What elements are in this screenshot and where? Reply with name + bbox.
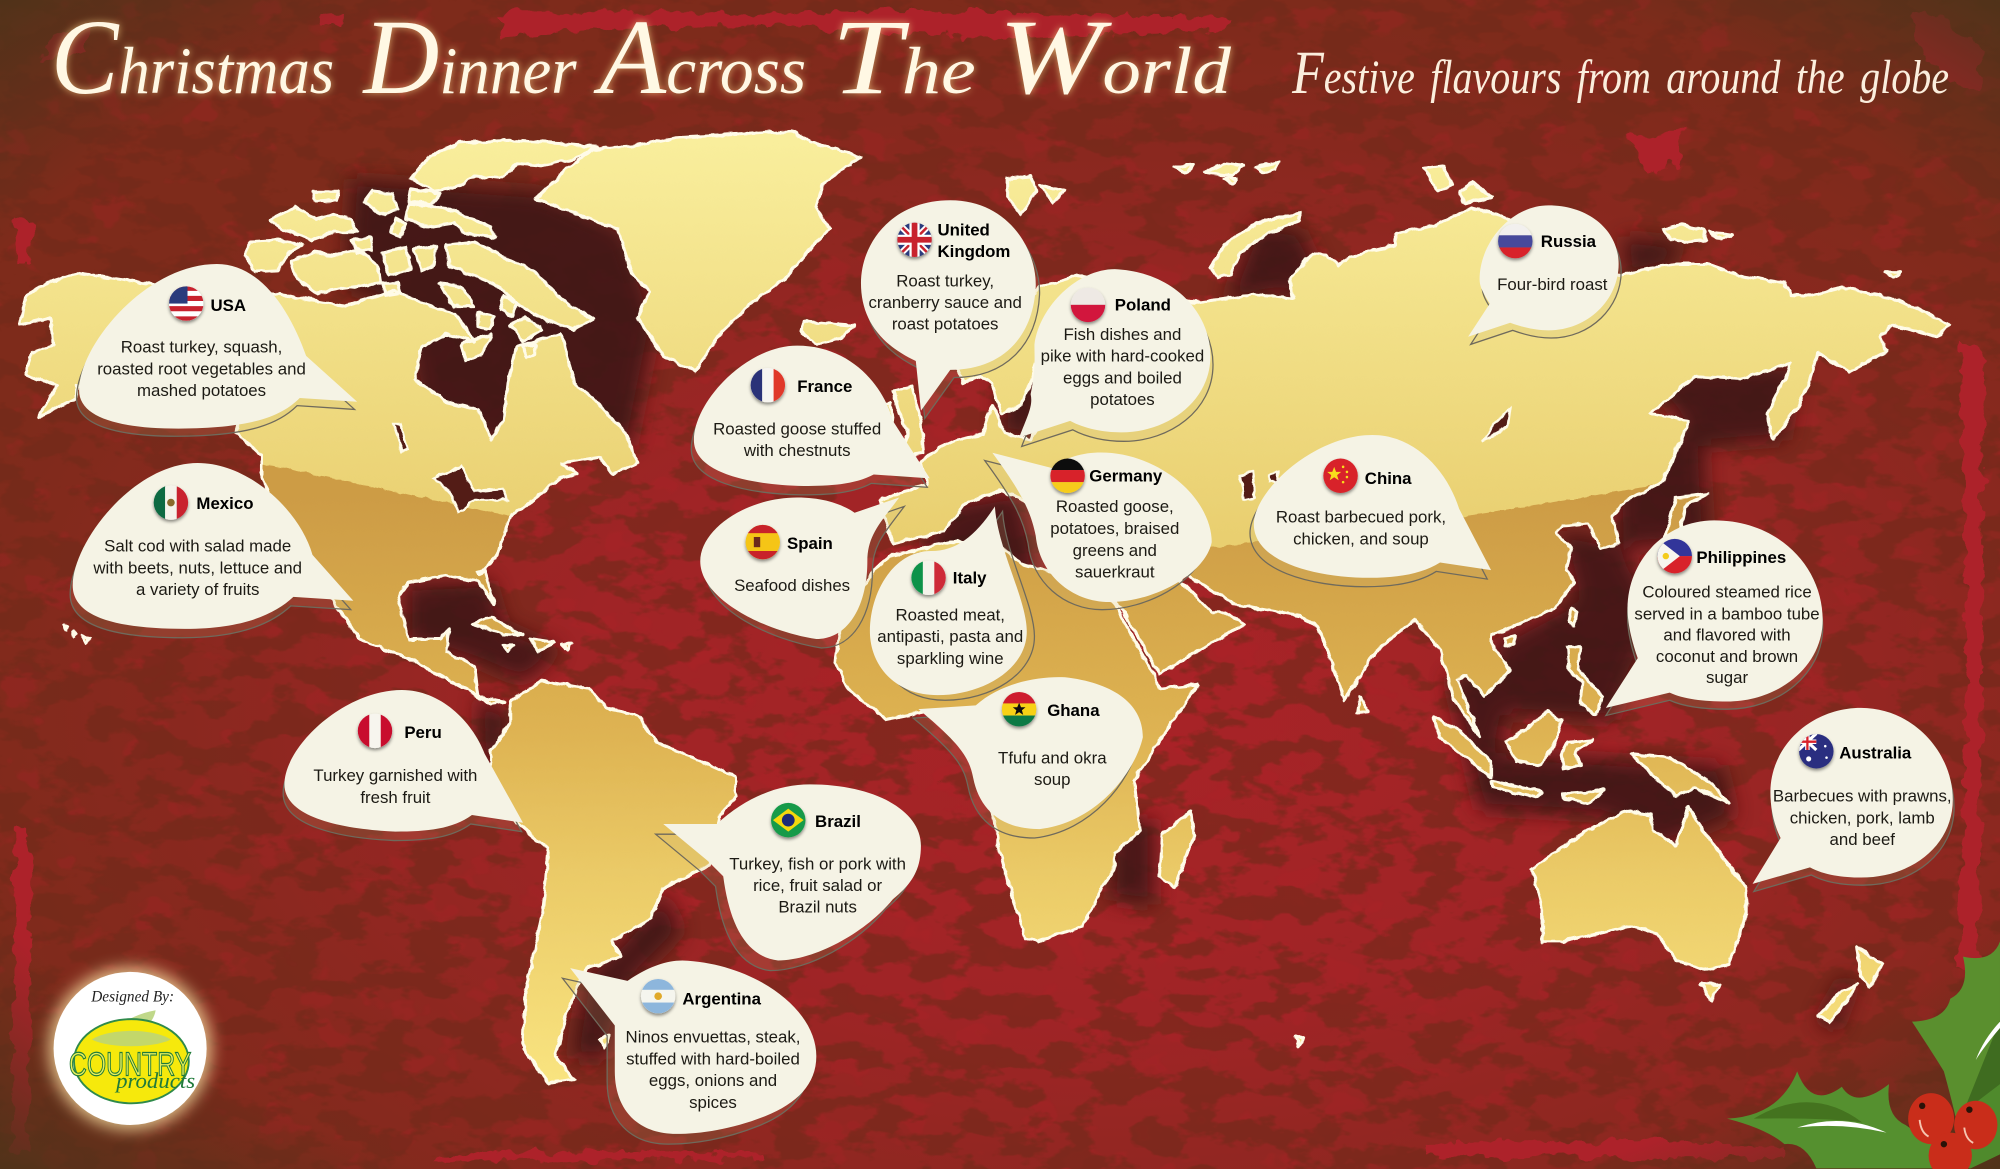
text: Fish dishes and (1064, 325, 1181, 344)
text: rice, fruit salad or (753, 876, 883, 895)
text: antipasti, pasta and (877, 627, 1023, 646)
panel: USA: USA (210, 296, 246, 315)
text: eggs and boiled (1063, 368, 1182, 387)
title: Dinner (362, 0, 577, 117)
flag: Poland (1070, 287, 1106, 323)
text: Roasted goose stuffed (713, 419, 881, 438)
panel: Spain: Spain (787, 534, 833, 553)
text: with beets, nuts, lettuce and (92, 558, 302, 577)
title: Christmas (51, 0, 334, 117)
text: sauerkraut (1075, 563, 1155, 582)
text: mashed potatoes (137, 381, 266, 400)
panel: France: France (797, 377, 852, 396)
text: potatoes (1090, 390, 1155, 409)
text: Tfufu and okra (998, 748, 1107, 767)
text: greens and (1073, 541, 1157, 560)
text: Ninos envuettas, steak, (626, 1028, 800, 1047)
text: Turkey garnished with (313, 766, 477, 785)
panel: Germany (985, 452, 1212, 610)
panel: Philippines (1606, 520, 1823, 716)
panel: Australia (1753, 708, 1954, 892)
text: and flavored with (1663, 625, 1791, 644)
panel: Italy: Italy (953, 569, 987, 588)
title: The (832, 0, 976, 117)
panel: United Kingdom (861, 200, 1040, 418)
text: roasted root vegetables and (97, 359, 306, 378)
flag: Italy (911, 560, 947, 596)
title (51, 0, 1232, 117)
text: Roasted goose, (1056, 497, 1174, 516)
text: Roasted meat, (896, 606, 1005, 625)
text: with chestnuts (743, 441, 851, 460)
panel: Australia: Australia (1839, 743, 1912, 762)
flag: Ghana (1001, 691, 1037, 727)
text: fresh fruit (360, 788, 431, 807)
flag: Russia (1497, 223, 1533, 259)
text: stuffed with hard-boiled (626, 1049, 800, 1068)
flag: USA (168, 286, 204, 321)
flag: Argentina (640, 978, 676, 1014)
land masses (18, 129, 1952, 1086)
sea shadows (344, 179, 1856, 1059)
panel: Poland: Poland (1115, 296, 1171, 315)
panel: Argentina (563, 960, 816, 1144)
panel: Philippines: Philippines (1696, 548, 1786, 567)
text: Turkey, fish or pork with (729, 854, 906, 873)
flag: Mexico (153, 485, 190, 520)
panel: Poland (1019, 269, 1213, 446)
panel: China (1250, 435, 1491, 587)
panel: France (691, 346, 930, 495)
panel: Peru (283, 690, 523, 841)
flag: Spain (745, 524, 781, 560)
text: Four-bird roast (1497, 275, 1608, 294)
panel: United Kingdom: United (938, 220, 990, 239)
panel: China: China (1365, 469, 1412, 488)
flag: France (750, 367, 786, 403)
panel: Brazil: Brazil (815, 812, 861, 831)
logo: Country Products (48, 967, 212, 1130)
text: sugar (1706, 668, 1748, 687)
text: coconut and brown (1656, 647, 1798, 666)
text: served in a bamboo tube (1634, 604, 1820, 623)
title: Across (593, 0, 806, 117)
holly leaves (1912, 941, 2000, 1148)
text: Roast barbecued pork, (1276, 507, 1446, 526)
panel: Brazil (656, 784, 921, 971)
panel: Italy (870, 506, 1034, 700)
text: Roast turkey, squash, (121, 338, 282, 357)
holly berries (1908, 1093, 1954, 1144)
panel: Russia (1468, 205, 1621, 344)
world map (18, 129, 1952, 1086)
panel: United Kingdom: Kingdom (938, 242, 1010, 261)
text: Seafood dishes (734, 576, 850, 595)
text: and beef (1829, 830, 1895, 849)
text: potatoes, braised (1050, 519, 1179, 538)
text: a variety of fruits (136, 580, 259, 599)
text: chicken, and soup (1293, 530, 1429, 549)
flag: Germany (1050, 458, 1085, 494)
flag: Australia (1798, 733, 1834, 769)
panel: Spain (700, 497, 904, 648)
flag: China (1323, 458, 1358, 494)
panel: Ghana (913, 677, 1143, 838)
title: W orld (999, 0, 1232, 117)
text: Coloured steamed rice (1642, 583, 1812, 602)
text: chicken, pork, lamb (1790, 808, 1935, 827)
text: soup (1034, 770, 1071, 789)
panel: Ghana: Ghana (1047, 701, 1100, 720)
flag: Brazil (770, 802, 806, 838)
text: roast potatoes (892, 315, 998, 334)
text: Barbecues with prawns, (1773, 787, 1952, 806)
logo: Country Products: products (114, 1069, 195, 1093)
panel: Mexico: Mexico (196, 494, 253, 513)
logo: Country Products: Designed By: (90, 988, 174, 1005)
flag: Philippines (1657, 538, 1693, 574)
panel: USA (77, 264, 357, 436)
flag: Peru (357, 713, 393, 749)
logo: Country Products: COUNTRY (69, 1046, 191, 1083)
text: spices (689, 1093, 737, 1112)
text: sparkling wine (897, 649, 1004, 668)
flag: UK (897, 222, 932, 258)
holly decoration (1727, 941, 2000, 1169)
text: Roast turkey, (896, 271, 994, 290)
text: cranberry sauce and (868, 293, 1022, 312)
panel: Mexico (70, 463, 353, 638)
text: Brazil nuts (778, 898, 857, 917)
panel: Peru: Peru (404, 723, 442, 742)
text: Salt cod with salad made (104, 537, 291, 556)
text: pike with hard-cooked (1041, 347, 1204, 366)
panel: Germany: Germany (1089, 467, 1163, 486)
panel: Argentina: Argentina (682, 989, 762, 1008)
panel: Russia: Russia (1541, 232, 1597, 251)
text: eggs, onions and (649, 1071, 777, 1090)
